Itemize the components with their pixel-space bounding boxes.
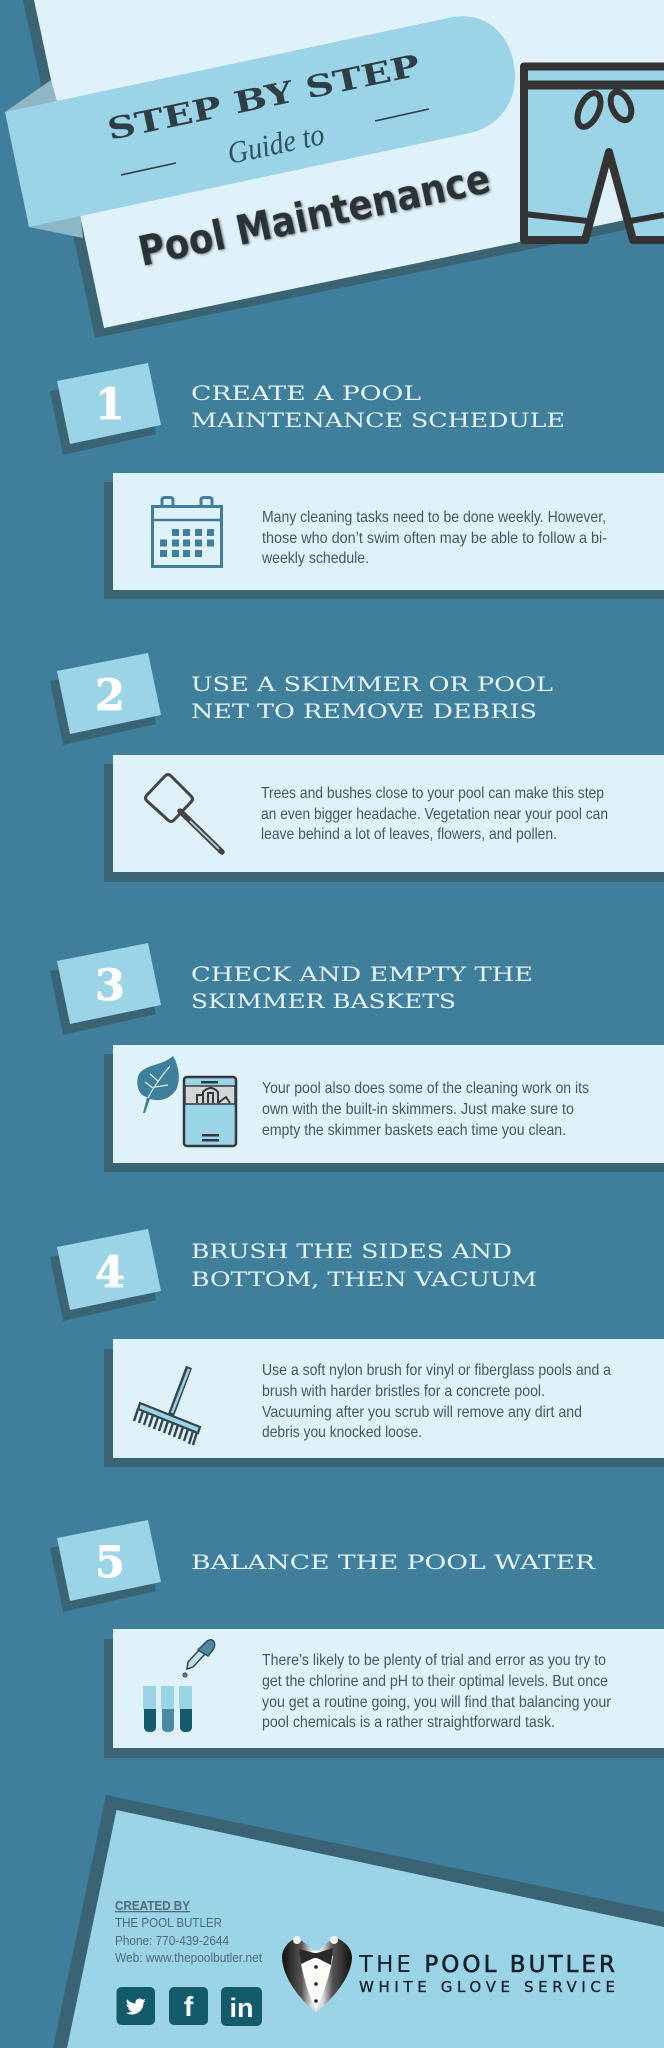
step 5 text: you get a routine going, you will find that balancing your xyxy=(262,1694,612,1711)
step 4 text: Vacuuming after you scrub will remove any dirt and xyxy=(262,1404,582,1421)
step 5 text: There’s likely to be plenty of trial and error as you try to xyxy=(262,1652,606,1669)
step 3 card xyxy=(104,1045,664,1172)
step 2 number badge: 2 xyxy=(95,671,125,721)
subtitle rule right xyxy=(375,109,429,121)
step 3 heading xyxy=(191,962,533,1013)
step 2 xyxy=(50,653,664,882)
subtitle rule left xyxy=(121,163,176,175)
icon: linkedin: in xyxy=(230,1993,254,2023)
credits block: Web: www.thepoolbutler.net xyxy=(115,1951,262,1965)
step 2 text: an even bigger headache. Vegetation near your pool can xyxy=(261,806,608,823)
step 4 heading xyxy=(191,1239,537,1291)
icon: skimmer basket xyxy=(184,1077,236,1146)
step 4 xyxy=(50,1229,664,1467)
step 4 text: Use a soft nylon brush for vinyl or fiberglass pools and a xyxy=(262,1362,611,1379)
step 2 text xyxy=(261,785,608,843)
logo: tuxedo mark xyxy=(282,1936,352,2012)
step 3 text xyxy=(262,1080,589,1139)
step 4 text: debris you knocked loose. xyxy=(262,1424,422,1441)
step 2 text: leave behind a lot of leaves, flowers, and pollen. xyxy=(261,826,557,843)
step 5 xyxy=(50,1520,664,1758)
step 5 heading: BALANCE THE POOL WATER xyxy=(191,1550,596,1574)
footer panel xyxy=(53,1795,664,2048)
step 4 number badge xyxy=(50,1229,161,1321)
credits block: THE POOL BUTLER xyxy=(115,1916,222,1930)
icon: skimmer net xyxy=(146,774,222,852)
step 1 number badge: 1 xyxy=(95,380,125,430)
step 2 card xyxy=(104,755,664,882)
step 4 number badge: 4 xyxy=(95,1248,125,1298)
step 1 heading: CREATE A POOL xyxy=(191,381,421,405)
step 3 heading: SKIMMER BASKETS xyxy=(191,989,456,1013)
step 4 text: brush with harder bristles for a concrete pool. xyxy=(262,1383,545,1400)
icon: twitter xyxy=(116,1987,155,2025)
step 3 heading: CHECK AND EMPTY THE xyxy=(191,962,533,986)
step 2 heading: NET TO REMOVE DEBRIS xyxy=(191,699,537,723)
step 1 number badge xyxy=(50,363,161,455)
credits block xyxy=(115,1899,262,1965)
step 5 number badge xyxy=(50,1520,161,1612)
step 3 xyxy=(50,943,664,1172)
icon: facebook xyxy=(169,1987,208,2025)
logo: wordmark xyxy=(358,1952,615,1996)
icon: calendar xyxy=(152,498,222,566)
step 5 number badge: 5 xyxy=(95,1538,125,1588)
title: step by step: STEP BY STEP xyxy=(104,49,423,148)
step 3 text: Your pool also does some of the cleaning work on its xyxy=(262,1080,589,1097)
step 3 number badge xyxy=(50,943,161,1035)
logo: wordmark: THE POOL BUTLER xyxy=(358,1952,615,1978)
step 5 text xyxy=(262,1652,612,1731)
icon: leaf xyxy=(137,1056,179,1113)
step 4 text xyxy=(262,1362,611,1441)
step 4 heading: BOTTOM, THEN VACUUM xyxy=(191,1267,537,1291)
subtitle: guide to: Guide to xyxy=(224,116,327,171)
step 1 text: weekly schedule. xyxy=(261,550,369,567)
step 3 number badge: 3 xyxy=(95,961,125,1011)
step 2 number badge xyxy=(50,653,161,745)
header panel xyxy=(5,0,664,338)
icon: test tubes and dropper xyxy=(143,1640,215,1732)
icon: pool brush xyxy=(134,1367,200,1445)
title: pool maintenance: Pool Maintenance xyxy=(134,154,494,276)
logo: wordmark: WHITE GLOVE SERVICE xyxy=(359,1978,615,1996)
icon: linkedin xyxy=(221,1987,262,2026)
step 1 xyxy=(50,363,664,599)
step 5 text: pool chemicals is a rather straightforward task. xyxy=(262,1714,555,1731)
step 1 heading xyxy=(191,381,565,432)
step 2 text: Trees and bushes close to your pool can make this step xyxy=(261,785,604,802)
step 1 text: those who don’t swim often may be able to follow a bi- xyxy=(262,530,607,547)
ribbon banner xyxy=(5,16,515,238)
icon: swim shorts xyxy=(524,66,664,240)
step 1 heading: MAINTENANCE SCHEDULE xyxy=(191,408,565,432)
step 4 card xyxy=(104,1339,664,1467)
step 3 text: empty the skimmer baskets each time you clean. xyxy=(262,1122,566,1139)
step 5 text: get the chlorine and pH to their optimal levels. But once xyxy=(262,1673,608,1690)
step 5 card xyxy=(104,1629,664,1758)
icon: facebook: f xyxy=(184,1991,194,2022)
step 1 text: Many cleaning tasks need to be done weekly. However, xyxy=(262,509,606,526)
step 2 heading xyxy=(191,672,553,723)
step 1 text xyxy=(261,509,607,567)
step 4 heading: BRUSH THE SIDES AND xyxy=(191,1239,512,1263)
step 2 heading: USE A SKIMMER OR POOL xyxy=(191,672,553,696)
credits block: Phone: 770-439-2644 xyxy=(115,1934,229,1948)
step 1 card xyxy=(104,473,664,599)
credits block: CREATED BY xyxy=(115,1899,191,1913)
step 3 text: own with the built-in skimmers. Just make sure to xyxy=(262,1101,574,1118)
